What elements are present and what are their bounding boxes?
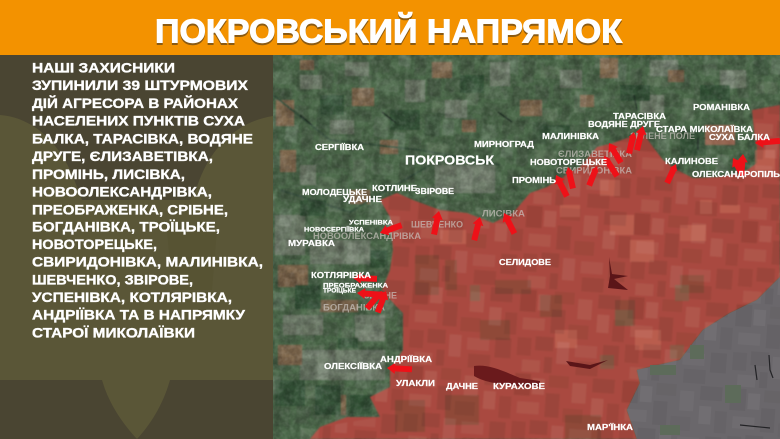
- place labels: ОЛЕКСІЇВКА: [324, 362, 382, 371]
- map: satellite base: [270, 52, 780, 439]
- faded place labels: СВИРИДОНІВКА: [556, 166, 633, 176]
- place labels: КОТЛЯРІВКА: [311, 271, 371, 280]
- place labels: КУРАХОВЕ: [493, 382, 546, 391]
- place labels: ВОДЯНЕ ДРУГЕ: [588, 120, 661, 129]
- place labels: УЛАКЛИ: [396, 379, 435, 388]
- place labels: ОЛЕКСАНДРОПІЛЬ: [692, 170, 780, 179]
- text block: summary: ДІЙ АГРЕСОРА В РАЙОНАХ: [32, 94, 239, 111]
- place labels: УСПЕНІВКА: [349, 220, 393, 226]
- text block: summary: НАСЕЛЕНИХ ПУНКТІВ СУХА: [32, 113, 245, 129]
- reservoirs in occupied land: [566, 257, 628, 369]
- text block: summary: СВИРИДОНІВКА, МАЛИНІВКА,: [32, 254, 263, 270]
- text block: summary: НОВОТОРЕЦЬКЕ,: [32, 236, 157, 252]
- place labels: СУХА БАЛКА: [709, 133, 770, 142]
- place labels: МАЛИНІВКА: [542, 132, 599, 141]
- text block: summary: [32, 60, 263, 340]
- arrows: enemy assault directions: [353, 125, 780, 375]
- place labels: УДАЧНЕ: [343, 195, 383, 204]
- place labels: КОТЛИНЕ: [372, 184, 418, 193]
- place labels: ПОКРОВСЬК: [405, 152, 494, 168]
- place labels: ДАЧНЕ: [446, 382, 479, 391]
- title: ПОКРОВСЬКИЙ НАПРЯМОК: [155, 14, 623, 52]
- place labels: ЗВІРОВЕ: [415, 187, 455, 196]
- place labels: МОЛОДЕЦЬКЕ: [302, 188, 368, 197]
- text block: summary: СТАРОЇ МИКОЛАЇВКИ: [32, 324, 195, 340]
- place labels: КАЛИНОВЕ: [665, 157, 719, 166]
- text block: summary: НАШІ ЗАХИСНИКИ: [32, 60, 175, 76]
- place labels: ПРОМІНЬ: [512, 176, 556, 185]
- title: ПОКРОВСЬКИЙ НАПРЯМОК: [155, 12, 623, 50]
- text block: summary: АНДРІЇВКА ТА В НАПРЯМКУ: [32, 307, 245, 323]
- place labels: [288, 103, 780, 432]
- faded place labels: НОВООЛЕКСАНДРІВКА: [313, 231, 422, 241]
- place labels: СЕЛИДОВЕ: [499, 258, 552, 267]
- reservoir: Kurakhove: [474, 366, 540, 387]
- faded place labels: БОГДАНІВКА: [323, 302, 386, 312]
- place labels: МИРНОГРАД: [474, 140, 534, 149]
- map: Donetsk urban area (grey): [620, 277, 780, 439]
- place labels: НОВОСЕРГІЇВКА: [304, 226, 364, 234]
- faded place labels: ШЕВЧЕНКО: [411, 220, 463, 230]
- header bar: [0, 0, 780, 55]
- place labels: РОМАНІВКА: [693, 103, 750, 112]
- text block: summary: ЗУПИНИЛИ 39 ШТУРМОВИХ: [32, 77, 249, 93]
- faded place labels: ЛИСІВКА: [482, 208, 526, 218]
- faded place labels: [313, 131, 695, 312]
- faded place labels: ЗЕЛЕНЕ ПОЛЕ: [630, 131, 695, 141]
- map: occupied territory (red): [310, 105, 780, 439]
- place labels: ТАРАСІВКА: [613, 112, 666, 121]
- place labels: АНДРІЇВКА: [380, 355, 432, 364]
- text block: summary: УСПЕНІВКА, КОТЛЯРІВКА,: [32, 289, 232, 305]
- place labels: МАР'ЇНКА: [587, 423, 633, 432]
- place labels: МУРАВКА: [288, 239, 335, 248]
- panel: left text background: [0, 55, 273, 439]
- faded place labels: ЄЛИЗАВЕТІВКА: [558, 149, 633, 159]
- text block: summary: ДРУГЕ, ЄЛИЗАВЕТІВКА,: [32, 148, 213, 164]
- text block: summary: НОВООЛЕКСАНДРІВКА,: [32, 184, 212, 200]
- text block: summary: БАЛКА, ТАРАСІВКА, ВОДЯНЕ: [32, 130, 253, 146]
- place labels: ТРОЇЦЬКЕ: [323, 288, 356, 294]
- text block: summary: ШЕВЧЕНКО, ЗВІРОВЕ,: [32, 272, 193, 288]
- text block: summary: БОГДАНІВКА, ТРОЇЦЬКЕ,: [32, 218, 220, 234]
- place labels: ПРЕОБРАЖЕНКА: [323, 282, 388, 290]
- place labels: СЕРГІЇВКА: [315, 143, 364, 152]
- text block: summary: ПРОМІНЬ, ЛИСІВКА,: [32, 166, 185, 182]
- place labels: НОВОТОРЕЦЬКЕ: [530, 158, 608, 167]
- text block: summary: ПРЕОБРАЖЕНКА, СРІБНЕ,: [32, 202, 228, 218]
- faded place labels: СРІБНЕ: [363, 290, 397, 300]
- place labels: СТАРА МИКОЛАЇВКА: [656, 125, 753, 134]
